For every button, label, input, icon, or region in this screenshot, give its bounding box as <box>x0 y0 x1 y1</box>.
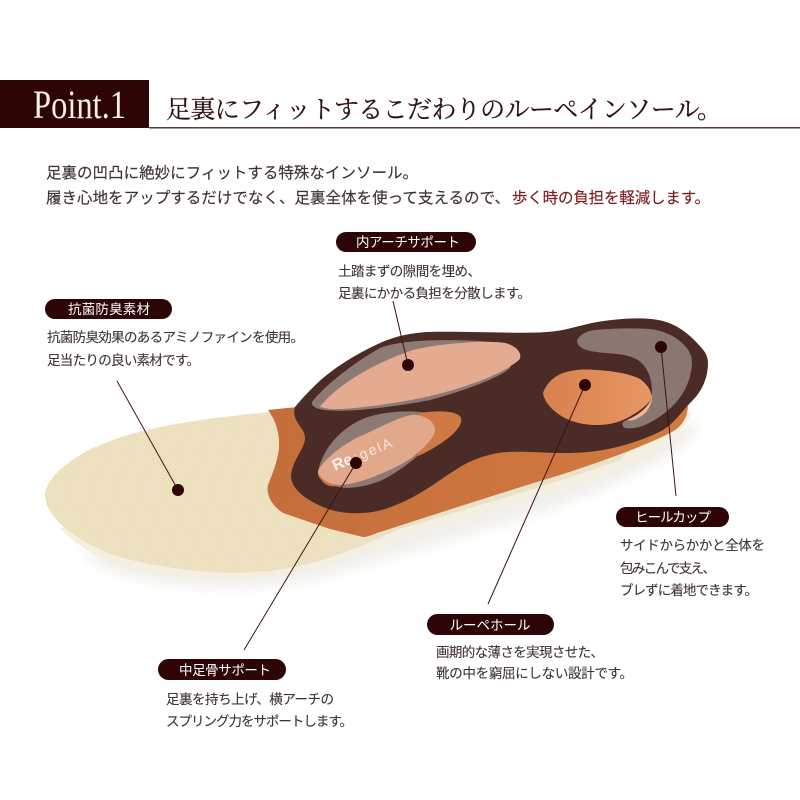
description: 土踏まずの隙間を埋め、 <box>338 264 481 279</box>
description <box>620 538 765 598</box>
heel cup grey <box>577 328 692 428</box>
description: 足裏にかかる負担を分散します。 <box>338 286 531 301</box>
label pill: 内アーチサポート <box>356 235 460 250</box>
callout: metatarsal support <box>158 457 362 729</box>
callout: antibacterial material <box>45 299 304 496</box>
callout: loupe hole <box>427 379 633 681</box>
description: ブレずに着地できます。 <box>620 582 758 598</box>
leader line <box>488 385 585 604</box>
marker <box>579 379 591 391</box>
title: 足裏にフィットするこだわりのルーペインソール。 <box>166 96 722 124</box>
label pill: 抗菌防臭素材 <box>68 302 150 317</box>
leader line <box>244 463 356 650</box>
callout: inner arch support <box>336 232 531 371</box>
shadow <box>80 420 700 587</box>
label pill <box>336 232 476 252</box>
description: 抗菌防臭効果のあるアミノファインを使用。 <box>47 329 304 345</box>
description <box>47 329 304 368</box>
label pill <box>45 299 172 319</box>
intro text: 履き心地をアップするだけでなく、足裏全体を使って支えるので、 <box>46 189 510 207</box>
description: 足当たりの良い素材です。 <box>47 353 200 368</box>
label pill: 中足骨サポート <box>179 663 271 678</box>
marker <box>350 457 362 469</box>
description <box>338 264 531 301</box>
inner arch pad <box>312 340 520 411</box>
leader line <box>117 381 178 490</box>
brand mark: Re <box>330 451 355 475</box>
callout: heel cup <box>616 341 765 598</box>
marker <box>402 359 414 371</box>
brand mark <box>330 434 396 475</box>
orange base layer <box>268 398 688 537</box>
description: 足裏を持ち上げ、横アーチの <box>166 692 334 707</box>
label pill <box>616 507 729 527</box>
leader line <box>661 347 676 496</box>
leader line <box>393 301 408 365</box>
intro text: 足裏の凹凸に絶妙にフィットする特殊なインソール。 <box>46 164 418 182</box>
marker <box>655 341 667 353</box>
description <box>436 645 633 681</box>
forefoot fabric <box>45 412 368 573</box>
description: 画期的な薄さを実現させた、 <box>436 645 604 660</box>
label pill: ヒールカップ <box>635 510 712 525</box>
description: 靴の中を窮屈にしない設計です。 <box>436 666 633 681</box>
dark insole <box>291 318 708 513</box>
heading tab: Point.1 <box>33 82 126 127</box>
white sole base <box>60 412 692 579</box>
header <box>0 80 800 128</box>
description: 包みこんで支え、 <box>620 561 716 576</box>
description: サイドからかかと全体を <box>620 538 765 553</box>
description: スプリング力をサポートします。 <box>166 714 353 729</box>
intro text <box>46 164 710 207</box>
brand mark: :gelA <box>351 434 396 465</box>
label pill <box>158 659 286 680</box>
marker <box>172 484 184 496</box>
description <box>166 692 353 729</box>
metatarsal pad <box>318 411 461 488</box>
label pill: ルーペホール <box>450 618 530 633</box>
insole illustration <box>45 318 708 587</box>
label pill <box>427 614 554 635</box>
intro text: 歩く時の負担を軽減します。 <box>512 189 710 207</box>
loupe hole <box>543 369 652 425</box>
